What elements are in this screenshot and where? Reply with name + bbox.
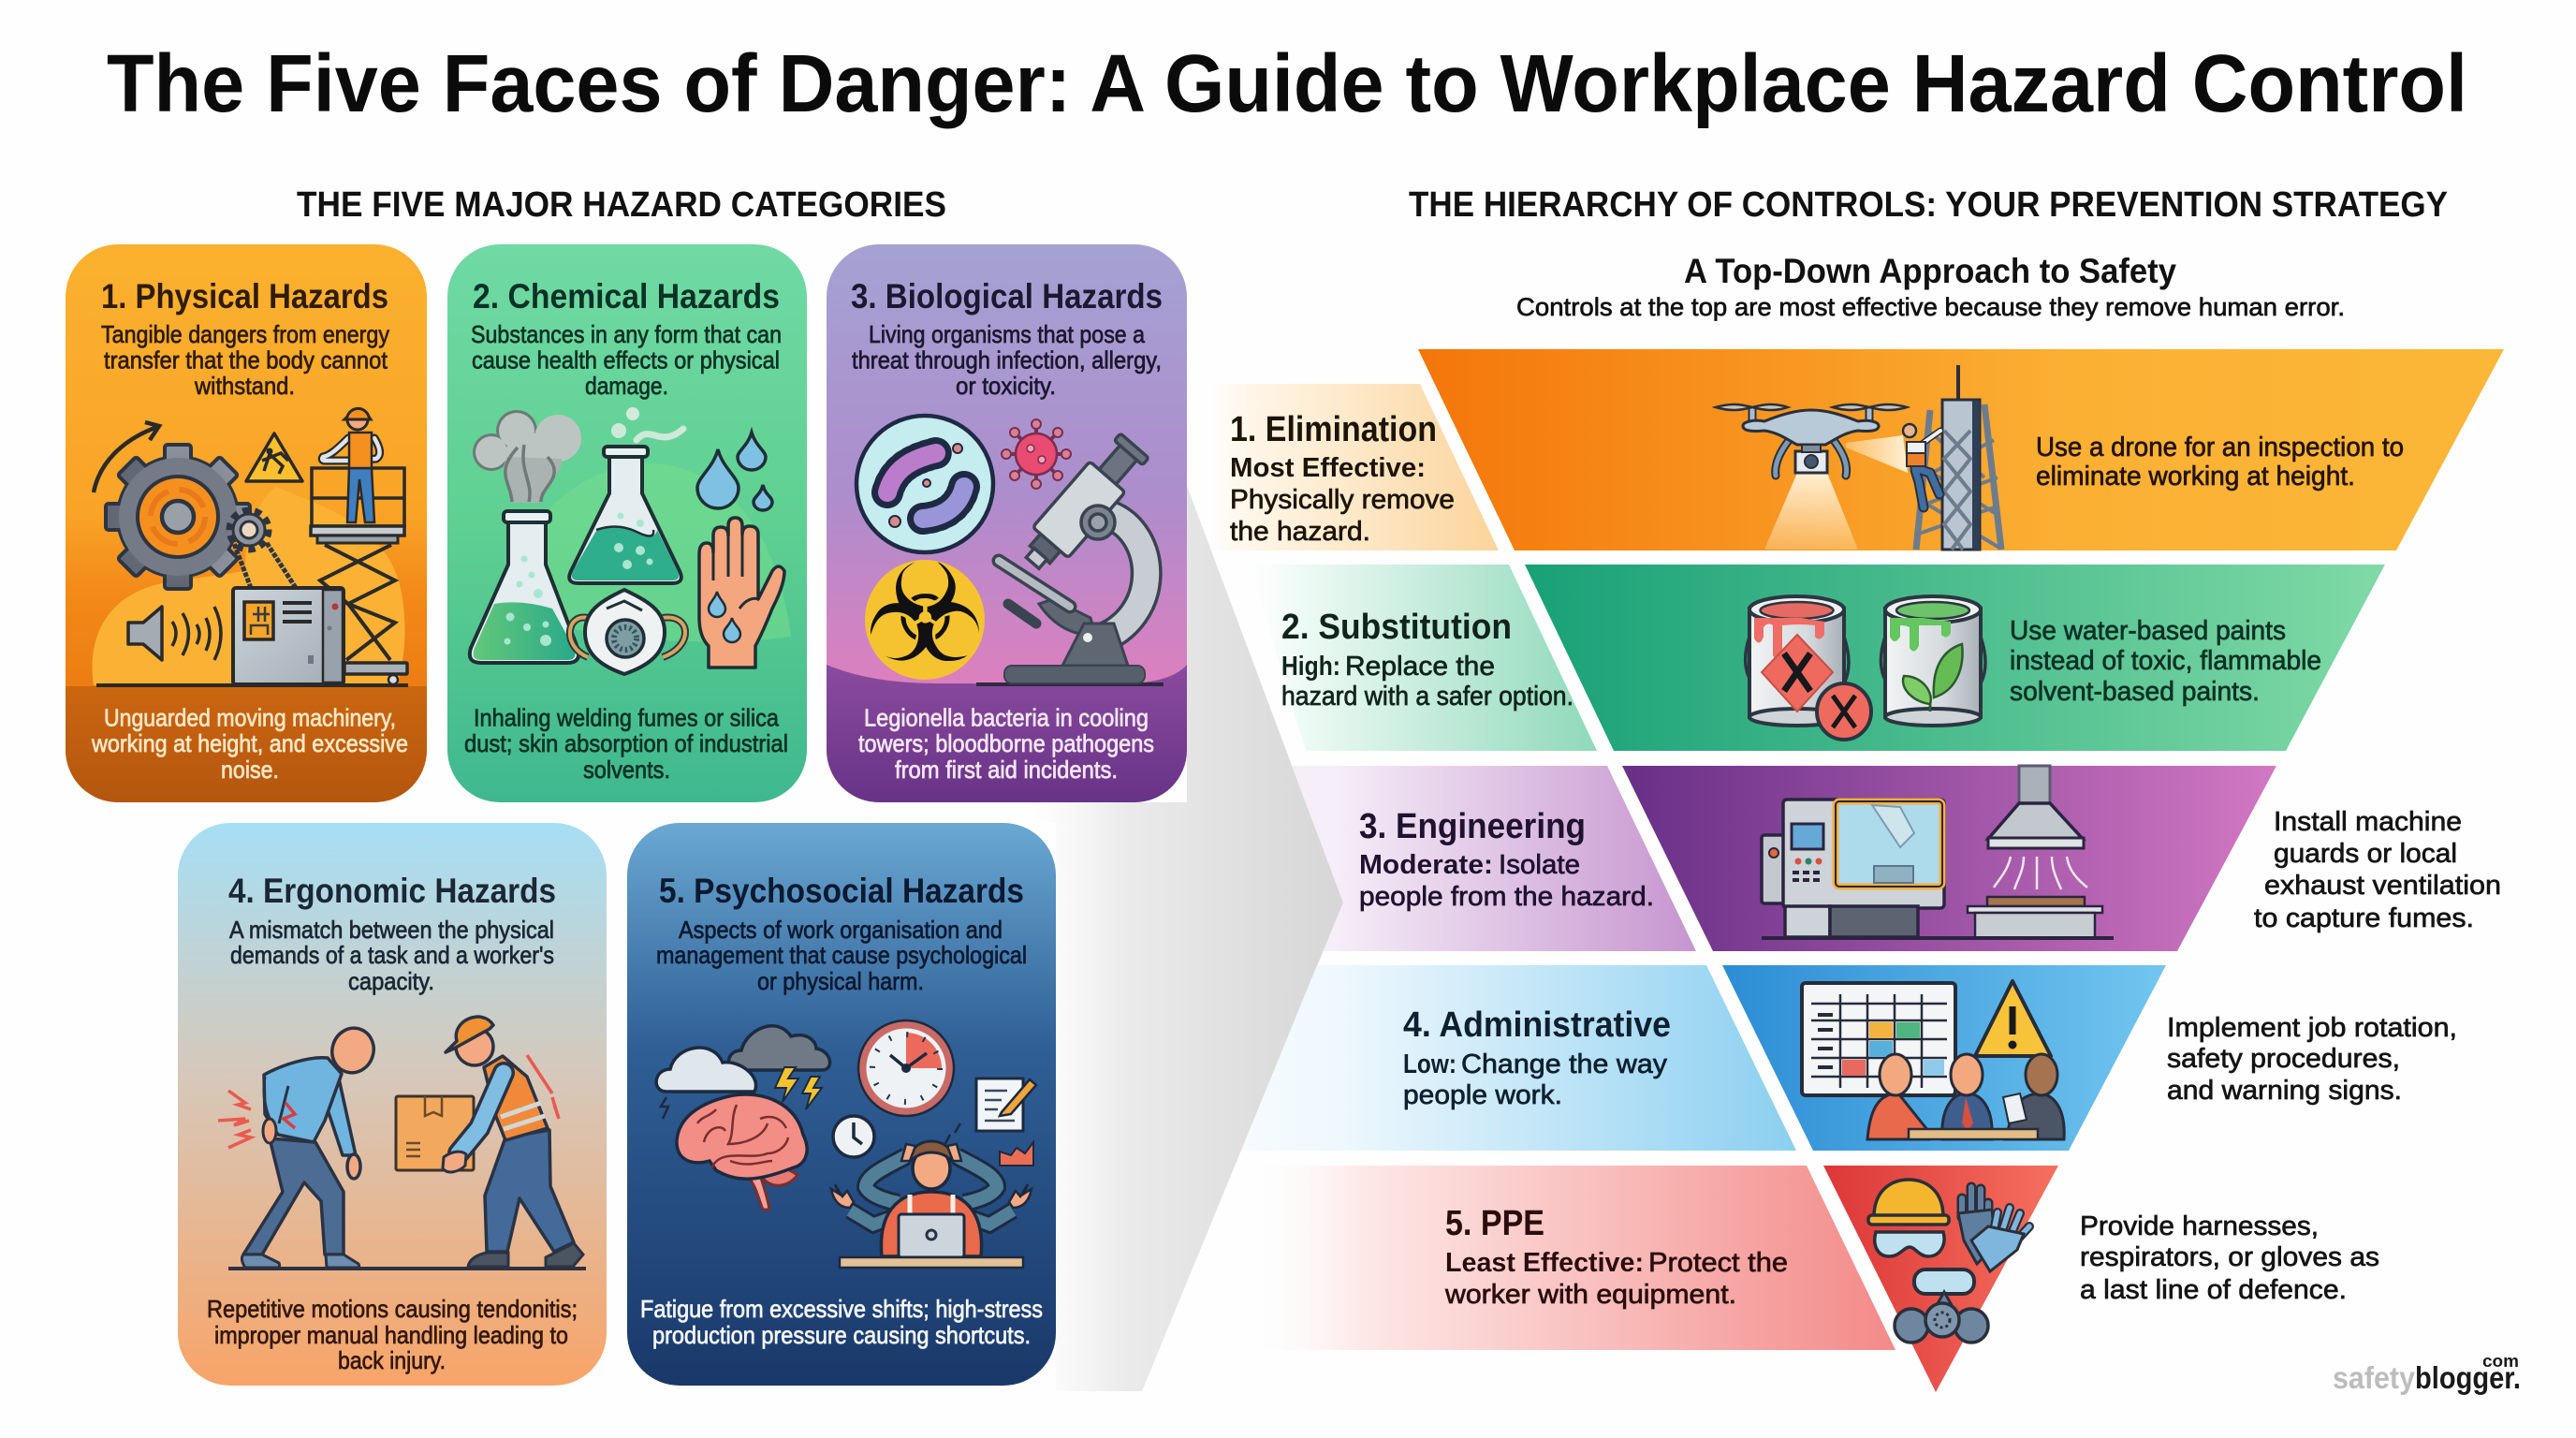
label: PPE (1444, 1204, 1788, 1310)
description: chemical: cause health effects or physical (472, 346, 780, 374)
subheading: top-down approach: A Top-Down Approach to Safety (1684, 252, 2176, 290)
example: biological (858, 704, 1154, 784)
text: PPE example: Provide harnesses, (2080, 1211, 2319, 1241)
label: substitution: High: (1281, 652, 1340, 682)
example: ergonomic: Repetitive motions causing tendonitis; (207, 1295, 578, 1323)
label: elimination (1230, 410, 1455, 547)
panel: level 1 elimination (1208, 349, 2504, 550)
label: engineering (1359, 807, 1654, 912)
label: administrative: Low: (1403, 1049, 1456, 1079)
heading: ergonomic: 4. Ergonomic Hazards (228, 872, 556, 910)
description: chemical: Substances in any form that can (471, 320, 782, 348)
panel: psychosocial hazards (627, 823, 1056, 1386)
description: psychosocial: Aspects of work organisation and (679, 916, 1003, 944)
text: PPE example: respirators, or gloves as (2080, 1242, 2379, 1272)
funnel arrow linking hazard categories to controls (1030, 486, 1343, 1391)
heading: biological: 3. Biological Hazards (851, 277, 1163, 315)
text: elimination example: Use a drone for an inspection to (2036, 433, 2404, 462)
text: substitution example (2010, 616, 2321, 707)
description: biological: threat through infection, allergy, (852, 346, 1162, 374)
example: physical: Unguarded moving machinery, (104, 704, 396, 732)
icon: flasks, mask, drops and hand (470, 407, 784, 674)
label: elimination: 1. Elimination (1230, 410, 1437, 449)
label: elimination: Most Effective: (1230, 453, 1426, 483)
subtext: controls explanation: Controls at the top are most effective because they remove human error. (1516, 293, 2345, 321)
example: chemical: solvents. (583, 756, 670, 784)
description: biological: or toxicity. (956, 372, 1056, 400)
label: administrative (1403, 1005, 1671, 1110)
label: substitution: Replace the (1345, 652, 1495, 682)
text: elimination example (2036, 433, 2404, 492)
text: engineering example: to capture fumes. (2254, 903, 2474, 933)
example: psychosocial: production pressure causing shortcuts. (652, 1321, 1031, 1349)
text: administrative example (2167, 1013, 2457, 1106)
panel: level 2 substitution (1250, 565, 2385, 751)
description: physical: transfer that the body cannot (104, 346, 388, 374)
heading: hazard categories: THE FIVE MAJOR HAZARD CATEGORIES (297, 185, 946, 225)
heading: physical: 1. Physical Hazards (101, 277, 388, 315)
heading: psychosocial: 5. Psychosocial Hazards (659, 872, 1024, 910)
panel: biological hazards (827, 244, 1187, 802)
text: administrative example: Implement job rotation, (2167, 1013, 2457, 1043)
description: psychosocial (656, 916, 1027, 995)
icon: machine guard and exhaust hood (1762, 766, 2114, 938)
text: substitution example: Use water-based paints (2010, 616, 2286, 646)
text: administrative example: safety procedures, (2167, 1044, 2400, 1074)
example: biological: Legionella bacteria in cooling (864, 704, 1149, 732)
label: substitution: hazard with a safer option. (1281, 682, 1573, 712)
text: substitution example: solvent-based paints. (2010, 677, 2260, 707)
panel: level 3 engineering (1292, 766, 2501, 951)
text: substitution example: instead of toxic, flammable (2010, 646, 2321, 676)
icon: helmet, goggles, gloves and respirator (1868, 1180, 2029, 1343)
label: elimination: the hazard. (1230, 517, 1370, 547)
example: ergonomic: improper manual handling leading to (214, 1321, 568, 1349)
example: biological: towers; bloodborne pathogens (858, 729, 1154, 757)
label: administrative: people work. (1403, 1080, 1562, 1110)
panel: level 4 administrative (1241, 965, 2457, 1151)
label: PPE: worker with equipment. (1444, 1280, 1736, 1310)
icon: machinery and height illustration (94, 408, 408, 685)
label: engineering: Isolate (1499, 850, 1580, 880)
icon: toxic paint can and water-based paint can (1746, 596, 1985, 740)
description: ergonomic: demands of a task and a worker's (230, 941, 554, 969)
label: PPE: 5. PPE (1445, 1204, 1544, 1243)
label: PPE: Protect the (1648, 1248, 1788, 1278)
logo: safetyblogger.com: com (2482, 1352, 2519, 1371)
label: engineering: 3. Engineering (1359, 807, 1586, 846)
icon: drone inspecting a tower (1716, 365, 2001, 550)
example: biological: from first aid incidents. (895, 756, 1118, 784)
icon: petri dish, virus, biohazard and microscope: ☣ (864, 536, 986, 694)
heading: chemical: 2. Chemical Hazards (473, 277, 780, 315)
description: psychosocial: management that cause psychological (656, 941, 1027, 969)
text: PPE example: a last line of defence. (2080, 1275, 2347, 1305)
label: administrative: Change the way (1461, 1049, 1668, 1079)
description: biological: Living organisms that pose a (869, 320, 1145, 348)
panel: level 5 PPE (1240, 1166, 2379, 1392)
label: substitution (1281, 608, 1573, 712)
icon: workers with back strain lifting a box (218, 1017, 586, 1269)
description: ergonomic: A mismatch between the physical (229, 916, 554, 944)
icon: petri dish, virus, biohazard and microscope (856, 416, 1164, 694)
label: PPE: Least Effective: (1445, 1248, 1644, 1278)
label: elimination: Physically remove (1230, 485, 1455, 515)
example: physical: noise. (221, 756, 279, 784)
heading: hierarchy of controls: THE HIERARCHY OF CONTROLS: YOUR PREVENTION STRATEGY (1409, 185, 2448, 225)
description: chemical (471, 320, 782, 400)
logo: safetyblogger.com: blogger. (2415, 1360, 2521, 1395)
label: substitution: 2. Substitution (1281, 608, 1512, 647)
example: physical: working at height, and excessive (91, 729, 408, 757)
logo: safetyblogger.com: safety (2333, 1360, 2416, 1395)
text: engineering example (2254, 807, 2501, 933)
logo: safetyblogger.com (2333, 1352, 2521, 1395)
example: ergonomic: back injury. (338, 1346, 446, 1374)
example: psychosocial (640, 1295, 1043, 1349)
text: engineering example: guards or local (2274, 839, 2457, 869)
example: chemical: dust; skin absorption of industrial (464, 729, 788, 757)
label: engineering: Moderate: (1359, 850, 1493, 880)
example: chemical (464, 704, 788, 784)
title: The Five Faces of Danger: A Guide to Workplace Hazard Control (107, 38, 2467, 129)
description: physical: withstand. (194, 372, 295, 400)
panel: physical hazards (66, 244, 427, 802)
example: ergonomic (207, 1295, 578, 1374)
description: biological (852, 320, 1162, 400)
text: engineering example: Install machine (2274, 807, 2462, 837)
text: PPE example (2080, 1211, 2379, 1305)
description: chemical: damage. (585, 372, 668, 400)
panel: ergonomic hazards (178, 823, 607, 1386)
panel: chemical hazards (447, 244, 807, 802)
text: engineering example: exhaust ventilation (2264, 871, 2501, 901)
description: physical: Tangible dangers from energy (101, 320, 389, 348)
example: physical (91, 704, 408, 784)
label: engineering: people from the hazard. (1359, 882, 1654, 912)
text: administrative example: and warning signs. (2167, 1076, 2402, 1106)
example: psychosocial: Fatigue from excessive shifts; high-stress (640, 1295, 1043, 1323)
icon: schedule board, warning sign and meeting (1802, 981, 2064, 1139)
icon: stress, fatigue and overworked person (656, 1020, 1036, 1268)
description: ergonomic (229, 916, 554, 995)
description: psychosocial: or physical harm. (757, 967, 924, 995)
label: administrative: 4. Administrative (1403, 1005, 1671, 1045)
example: chemical: Inhaling welding fumes or silica (474, 704, 779, 732)
text: elimination example: eliminate working at height. (2036, 462, 2355, 492)
description: physical (101, 320, 389, 400)
description: ergonomic: capacity. (348, 967, 434, 995)
